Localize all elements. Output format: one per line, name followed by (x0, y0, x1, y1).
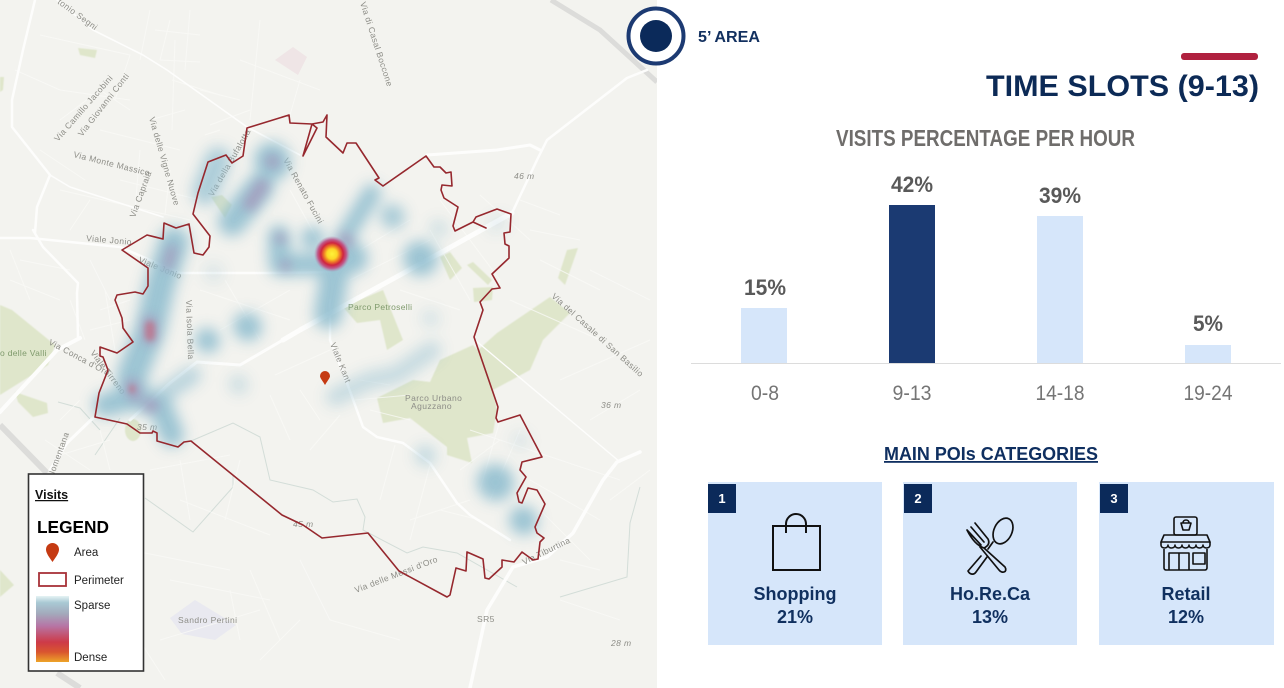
map street labels: SR5 (477, 614, 495, 624)
map street labels: Parco Urbano (405, 393, 462, 403)
bar 14-18: 39% (1039, 183, 1081, 208)
bar 14-18 (1036, 183, 1084, 405)
map street labels: 36 m (601, 400, 622, 410)
heatmap: medium purple zones (132, 161, 346, 406)
icon: store (1161, 517, 1210, 570)
map street labels: Via Conca d'Oro (47, 337, 112, 378)
map minor roads (10, 10, 650, 680)
panel: white background (657, 0, 1284, 688)
label: Shopping (754, 584, 836, 604)
value: 13% (972, 607, 1008, 627)
map street labels: Via Camillo Jacobini (52, 73, 115, 143)
map street labels: Via Isola Bella (184, 300, 196, 360)
badge 3 (1100, 484, 1128, 513)
map street labels: Sandro Pertini (178, 615, 237, 625)
map street labels: 46 m (514, 171, 534, 181)
map street labels: Via Tiburtina (520, 535, 572, 567)
area pin (320, 371, 330, 385)
legend gradient (36, 596, 69, 662)
map street labels (0, 0, 646, 648)
map street labels: Viale Jonio (137, 255, 184, 281)
bar 19-24: 19-24 (1184, 382, 1233, 405)
panel: map (0, 0, 657, 688)
map street labels: Via Capraia (127, 170, 154, 219)
legend label: area: Area (74, 547, 99, 559)
map main roads (0, 0, 647, 688)
bar 9-13 (889, 172, 935, 405)
legend label: sparse: Sparse (74, 600, 110, 612)
map street labels: Viale Kant (328, 341, 353, 384)
bar 0-8: 0-8 (751, 382, 779, 405)
map special areas (170, 47, 307, 640)
legend subtitle: Visits (35, 488, 68, 502)
value: 12% (1168, 607, 1204, 627)
map street labels: o delle Valli (0, 348, 47, 358)
legend icon: area pin (46, 543, 59, 562)
map parks (0, 48, 578, 597)
badge 3: 3 (1110, 491, 1118, 506)
legend label: perimeter: Perimeter (74, 575, 124, 587)
perimeter (95, 115, 545, 597)
map street labels: Via delle Vigne Nuove (147, 116, 182, 207)
map street labels: Via Monte Massico (73, 149, 151, 178)
icon: fork and spoon (967, 515, 1017, 574)
map street labels: Viale Tirreno (88, 348, 128, 396)
legend label: dense: Dense (74, 652, 107, 664)
section heading: MAIN POIs CATEGORIES (884, 444, 1098, 464)
map street labels: Viale Jonio (86, 233, 132, 247)
map street labels: 45 m (293, 519, 314, 529)
card: ho.re.ca (903, 482, 1077, 645)
map street labels: Via del Casale di San Basilio (550, 291, 646, 379)
map street labels: Nomentana (45, 431, 71, 479)
card: retail (1099, 482, 1274, 645)
label: Ho.Re.Ca (950, 584, 1031, 604)
legend icon: perimeter (39, 573, 66, 586)
legend (28, 474, 144, 671)
bar 14-18: 14-18 (1036, 382, 1084, 405)
label: Retail (1161, 584, 1211, 604)
badge 1: 1 (718, 491, 726, 506)
map rivers (58, 402, 640, 597)
map street labels: 35 m (137, 422, 158, 432)
map street labels: Parco Petroselli (348, 302, 412, 312)
bar 0-8 (741, 275, 787, 405)
heatmap: hot spot (314, 236, 350, 272)
bar 19-24 (1184, 311, 1233, 405)
map street labels: 28 m (610, 638, 632, 648)
map street labels: Via della Bufalotta (206, 127, 253, 198)
area label: 5’ AREA (698, 29, 760, 46)
icon: shopping bag (773, 514, 820, 570)
legend heading: LEGEND (37, 517, 109, 537)
map street labels: Via Giovanni Conti (76, 71, 131, 138)
value: 21% (777, 607, 813, 627)
title: TIME SLOTS (9-13) (986, 70, 1259, 103)
title accent bar (1181, 53, 1258, 60)
badge 2 (904, 484, 932, 513)
area marker icon (628, 8, 684, 64)
map street labels: Via delle Messi d'Oro (353, 554, 439, 595)
badge 1 (708, 484, 736, 513)
bar 0-8: 15% (744, 275, 786, 300)
bar chart (691, 172, 1281, 405)
bar 9-13: 9-13 (892, 382, 932, 405)
bar 9-13: 42% (891, 172, 933, 197)
badge 2: 2 (914, 491, 922, 506)
card: shopping (708, 482, 882, 645)
map street labels: Via di Casal Boccone (358, 1, 395, 88)
chart heading: VISITS PERCENTAGE PER HOUR (836, 125, 1135, 151)
map railway and highway (0, 0, 657, 688)
bar 19-24: 5% (1193, 311, 1223, 336)
heatmap: sparse blue zones (105, 160, 524, 521)
map street labels: Aguzzano (411, 401, 452, 411)
map street labels: Via Renato Fucini (281, 156, 326, 225)
heatmap: dense red zones (132, 326, 150, 390)
